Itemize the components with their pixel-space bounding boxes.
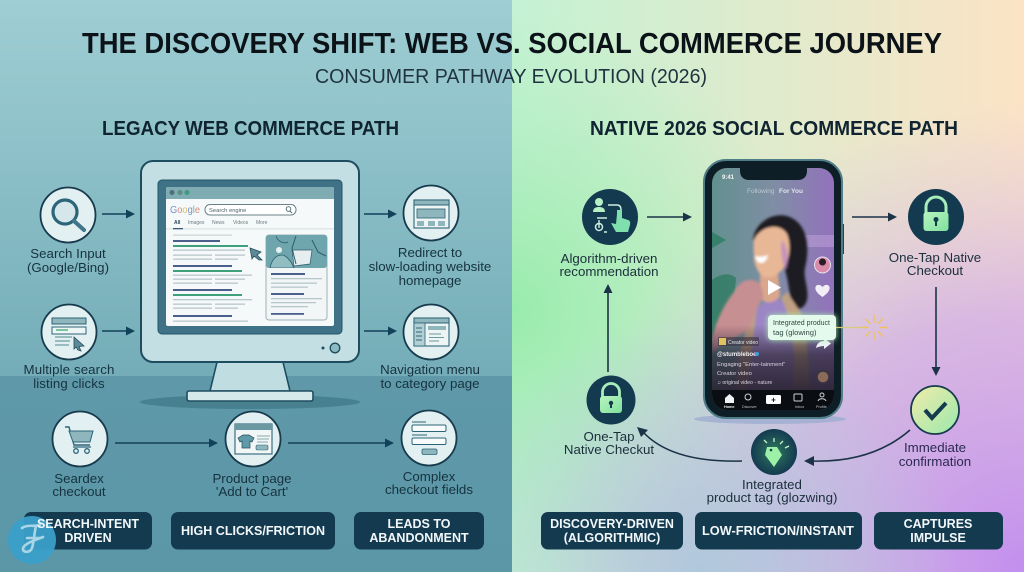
label: Integrated [742,477,802,492]
arrow [647,212,692,222]
step: navigation menu [380,304,480,391]
monitor illustration: Google [170,204,200,216]
badge: high clicks/friction: HIGH CLICKS/FRICTION [181,524,325,538]
glowing product tag callout: tag (glowing) [773,328,817,337]
label: Seardex [54,471,104,486]
label: product tag (glozwing) [707,490,837,505]
feed tabs: For You [779,188,803,195]
label: checkout [52,484,106,499]
monitor illustration: Images [188,220,205,226]
step: redirect to homepage [369,186,491,288]
badge: leads to abandonment: ABANDONMENT [369,531,469,545]
caption overlay: @stumbleboe [717,352,757,358]
glowing product tag callout: Integrated product [773,318,831,327]
monitor illustration: All [174,220,181,226]
badge: low-friction/instant: LOW-FRICTION/INSTANT [702,524,854,538]
label: Native Checkut [564,442,654,457]
icon: product page window [226,412,280,466]
step: multiple search listing clicks [24,304,114,391]
caption overlay: Creator video [717,371,752,377]
side rail icons [814,257,831,383]
badge text: search-intent driven: SEARCH-INTENT [37,517,139,531]
step: checkout cart [52,412,108,499]
badge: discovery-driven: DISCOVERY-DRIVEN [550,517,674,531]
monitor illustration: Videos [233,220,249,226]
label: to category page [380,376,480,391]
badge: captures impulse: CAPTURES [904,517,972,531]
label: listing clicks [33,376,105,391]
bottom navigation: Inbox [795,405,804,409]
monitor illustration: More [256,220,268,226]
badge: high clicks/friction [171,512,335,550]
caption overlay [717,337,785,386]
arrow [364,326,397,336]
label: Complex [403,469,456,484]
monitor illustration: Search engine [209,208,246,214]
label: Redirect to [398,245,462,260]
label: Multiple search [24,362,114,377]
curved arrow [804,430,910,466]
bottom navigation: Home [724,405,735,409]
badge text: search-intent driven: DRIVEN [64,531,112,545]
caption overlay: ♫ original video - nature [717,380,772,386]
icon: algorithm with pointing hand [582,189,638,245]
arrow [288,438,394,448]
icon: navigation page [404,304,458,360]
subtitle: CONSUMER PATHWAY EVOLUTION (2026) [315,66,707,88]
badge: captures impulse [874,512,1003,550]
step: one-tap native checkout bottom [564,376,654,457]
step: algorithm-driven recommendation [559,189,659,279]
badge: leads to abandonment [354,512,484,550]
caption overlay: Engaging "Enter-tainment" [717,362,785,368]
badge: low-friction/instant [695,512,862,550]
label: homepage [399,273,461,288]
label: Checkout [907,263,963,278]
label: Algorithm-driven [561,251,657,266]
title: THE DISCOVERY SHIFT: WEB VS. SOCIAL COMMERCE JOURNEY [82,28,942,60]
step: complex checkout fields [385,410,473,497]
caption overlay: Creator video [728,340,758,346]
badge background: search-intent driven [24,512,152,550]
monitor illustration: News [212,220,225,226]
arrow [932,287,940,376]
step: search input [27,188,109,275]
badge: discovery-driven [541,512,683,550]
status bar text: 9:41 [722,175,735,181]
label: 'Add to Cart' [216,484,288,499]
label: (Google/Bing) [27,260,109,275]
phone notch [740,168,807,180]
arrow [102,210,135,218]
icon: check mark [911,386,959,434]
label: recommendation [559,264,659,279]
icon: website layout [404,186,458,240]
play button [768,280,781,295]
monitor illustration [140,161,360,409]
badge: leads to abandonment: LEADS TO [388,517,451,531]
bottom navigation: Discover [742,405,758,409]
label: slow-loading website [369,259,491,274]
heading: native social commerce path: NATIVE 2026 SOCIAL COMMERCE PATH [590,118,958,140]
icon: glowing tag [751,429,797,475]
panel: social commerce background [512,0,1024,572]
icon: padlock [586,376,636,424]
icon: listing with cursor [42,304,96,360]
step: integrated product tag [707,429,837,505]
arrow [604,284,612,372]
step: one-tap native checkout top [889,189,981,278]
icon: magnifying glass [40,188,96,242]
logo watermark [8,516,56,564]
arrow [852,212,897,222]
heading: legacy web commerce path: LEGACY WEB COMMERCE PATH [102,118,399,140]
curved arrow [637,427,742,461]
arrow [364,210,397,218]
arrow [102,326,135,336]
panel: legacy web background [0,0,512,572]
bottom navigation [724,393,827,409]
label: One-Tap [584,429,634,444]
icon: shopping cart [52,412,108,466]
label: Immediate [904,440,966,455]
woman figure [712,215,809,390]
step: product page [212,412,292,499]
badge: captures impulse: IMPULSE [910,531,966,545]
feed tabs: Following [747,188,775,195]
label: Search Input [30,246,106,261]
bottom navigation: + [771,396,776,404]
bottom navigation: Profile [816,405,827,409]
icon: padlock [908,189,964,245]
step: immediate confirmation [899,386,971,469]
phone illustration [694,160,887,424]
label: checkout fields [385,482,473,497]
badge: discovery-driven: (ALGORITHMIC) [564,531,660,545]
icon: form fields [402,410,456,466]
glowing product tag callout [768,315,887,340]
label: One-Tap Native [889,250,981,265]
label: Product page [212,471,292,486]
arrow [115,438,218,448]
label: confirmation [899,454,971,469]
label: Navigation menu [380,362,480,377]
